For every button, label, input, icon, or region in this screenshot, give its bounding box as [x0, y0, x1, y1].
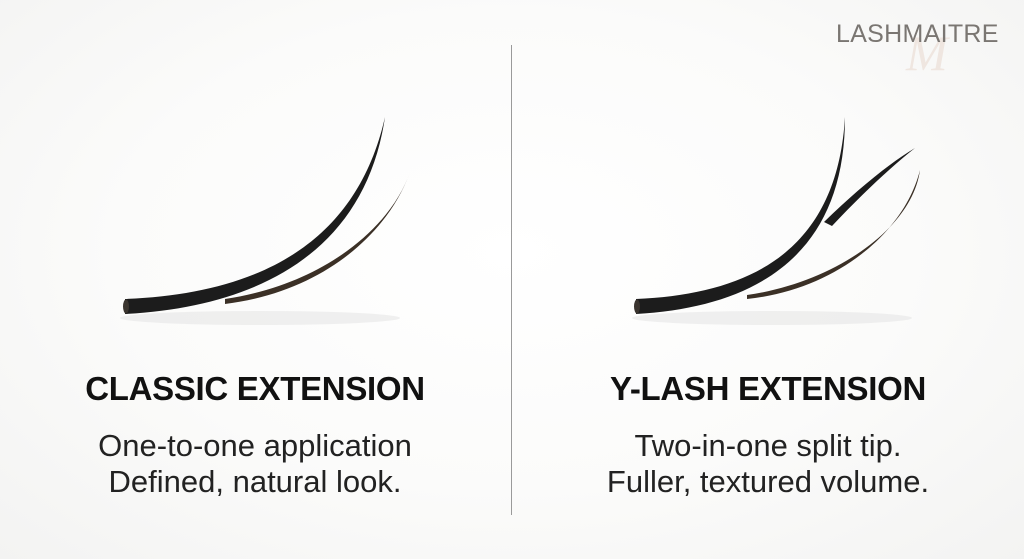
logo: [836, 20, 999, 81]
text: y-lash description: Fuller, textured volume.: [607, 464, 929, 499]
heading: classic: CLASSIC EXTENSION: [85, 370, 425, 407]
divider: [511, 45, 512, 515]
text: y-lash description: Two-in-one split tip.: [634, 428, 902, 463]
logo text: LASHMAITRE: [836, 20, 999, 48]
illustration: classic lash: [120, 117, 407, 325]
illustration: y-lash: [632, 118, 920, 325]
text: y-lash description: [607, 428, 929, 499]
heading: y-lash: Y-LASH EXTENSION: [610, 370, 926, 407]
text: classic description: [98, 428, 412, 499]
text: classic description: Defined, natural look.: [109, 464, 401, 499]
logo monogram: M: [906, 25, 948, 81]
text: classic description: One-to-one application: [98, 428, 412, 463]
